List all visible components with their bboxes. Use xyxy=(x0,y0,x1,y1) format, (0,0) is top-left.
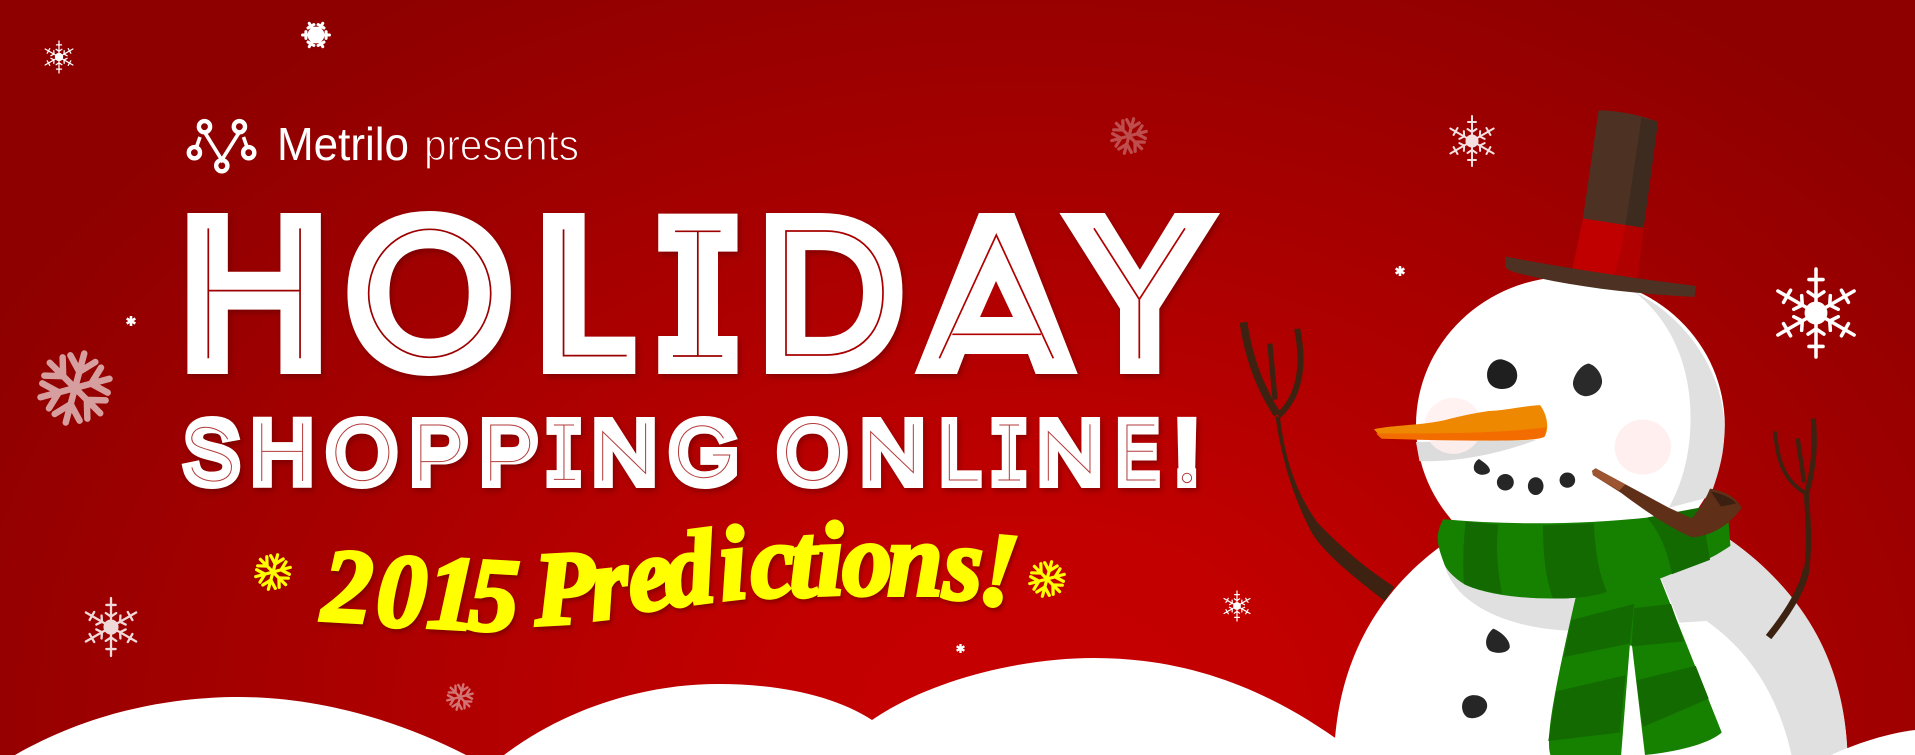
logo text: Metrilo presents: presents xyxy=(424,121,579,170)
scarf xyxy=(1438,506,1730,755)
body shadow xyxy=(1445,540,1847,755)
snowflake: top left xyxy=(44,41,74,73)
title: SHOPPING ONLINE!: O xyxy=(327,404,396,502)
nose xyxy=(1374,405,1547,441)
snowflake: tiny right star xyxy=(1396,266,1404,276)
title: SHOPPING ONLINE!: N xyxy=(593,404,656,502)
snowflake: faded bottom xyxy=(443,681,477,713)
title: SHOPPING ONLINE!: L xyxy=(940,404,980,502)
cheeks xyxy=(1425,398,1671,475)
head xyxy=(1416,277,1725,573)
snowman xyxy=(1243,110,1847,755)
title: HOLIDAY: H xyxy=(182,180,326,406)
top hat xyxy=(1505,110,1696,297)
title: SHOPPING ONLINE!: E xyxy=(1117,404,1159,502)
snowflake: faded near logo xyxy=(1106,114,1152,158)
title: SHOPPING ONLINE!: P xyxy=(410,404,467,502)
subtitle: 2015 Predictions!: 2015 Predictions! xyxy=(318,502,1023,655)
snowflake: above hat xyxy=(1448,116,1496,166)
snowflake: yellow right xyxy=(1024,557,1070,601)
nose shadow xyxy=(1416,440,1537,461)
eyes xyxy=(1487,359,1602,396)
title: SHOPPING ONLINE!: N xyxy=(861,404,925,502)
left arm xyxy=(1243,322,1394,601)
title: SHOPPING ONLINE!: I xyxy=(544,408,584,510)
title: SHOPPING ONLINE!: H xyxy=(251,404,313,502)
snowflake: top fat xyxy=(303,22,329,48)
logo: Metrilo network icon xyxy=(189,121,254,171)
title: SHOPPING ONLINE!: G xyxy=(670,404,738,502)
pipe xyxy=(1592,468,1742,537)
right arm xyxy=(1769,419,1814,637)
snowflake: yellow left xyxy=(250,550,296,594)
body xyxy=(1334,540,1847,755)
title: HOLIDAY: I xyxy=(651,189,745,427)
snow hills centre xyxy=(504,658,1345,755)
title: SHOPPING ONLINE!: I xyxy=(989,408,1029,510)
title: SHOPPING ONLINE!: S xyxy=(184,404,239,502)
title: HOLIDAY: A xyxy=(930,180,1062,406)
snowflake: large faded left xyxy=(30,344,120,432)
title: HOLIDAY: O xyxy=(349,180,510,406)
logo text: Metrilo presents xyxy=(277,118,579,170)
title: SHOPPING ONLINE!: N xyxy=(1038,404,1102,502)
snowflake: big right xyxy=(1774,269,1858,357)
logo text: Metrilo presents: Metrilo xyxy=(277,118,409,170)
snow hills left xyxy=(15,697,466,755)
head shadow xyxy=(1634,291,1724,508)
snowflake: tiny left star xyxy=(127,316,135,326)
title: HOLIDAY: Y xyxy=(1075,180,1205,406)
snowflake: tiny bottom star xyxy=(957,644,964,653)
mouth xyxy=(1474,459,1575,495)
title: HOLIDAY: D xyxy=(761,180,901,406)
snowflake: near snowman arm xyxy=(1223,591,1251,621)
title: SHOPPING ONLINE!: P xyxy=(480,404,537,502)
title: HOLIDAY: L xyxy=(540,180,632,406)
snow hill right corner xyxy=(1831,730,1915,755)
snowflake: lower left xyxy=(83,598,139,656)
title: SHOPPING ONLINE!: ! xyxy=(1175,404,1199,502)
title: SHOPPING ONLINE!: O xyxy=(778,404,846,502)
buttons xyxy=(1462,629,1510,718)
